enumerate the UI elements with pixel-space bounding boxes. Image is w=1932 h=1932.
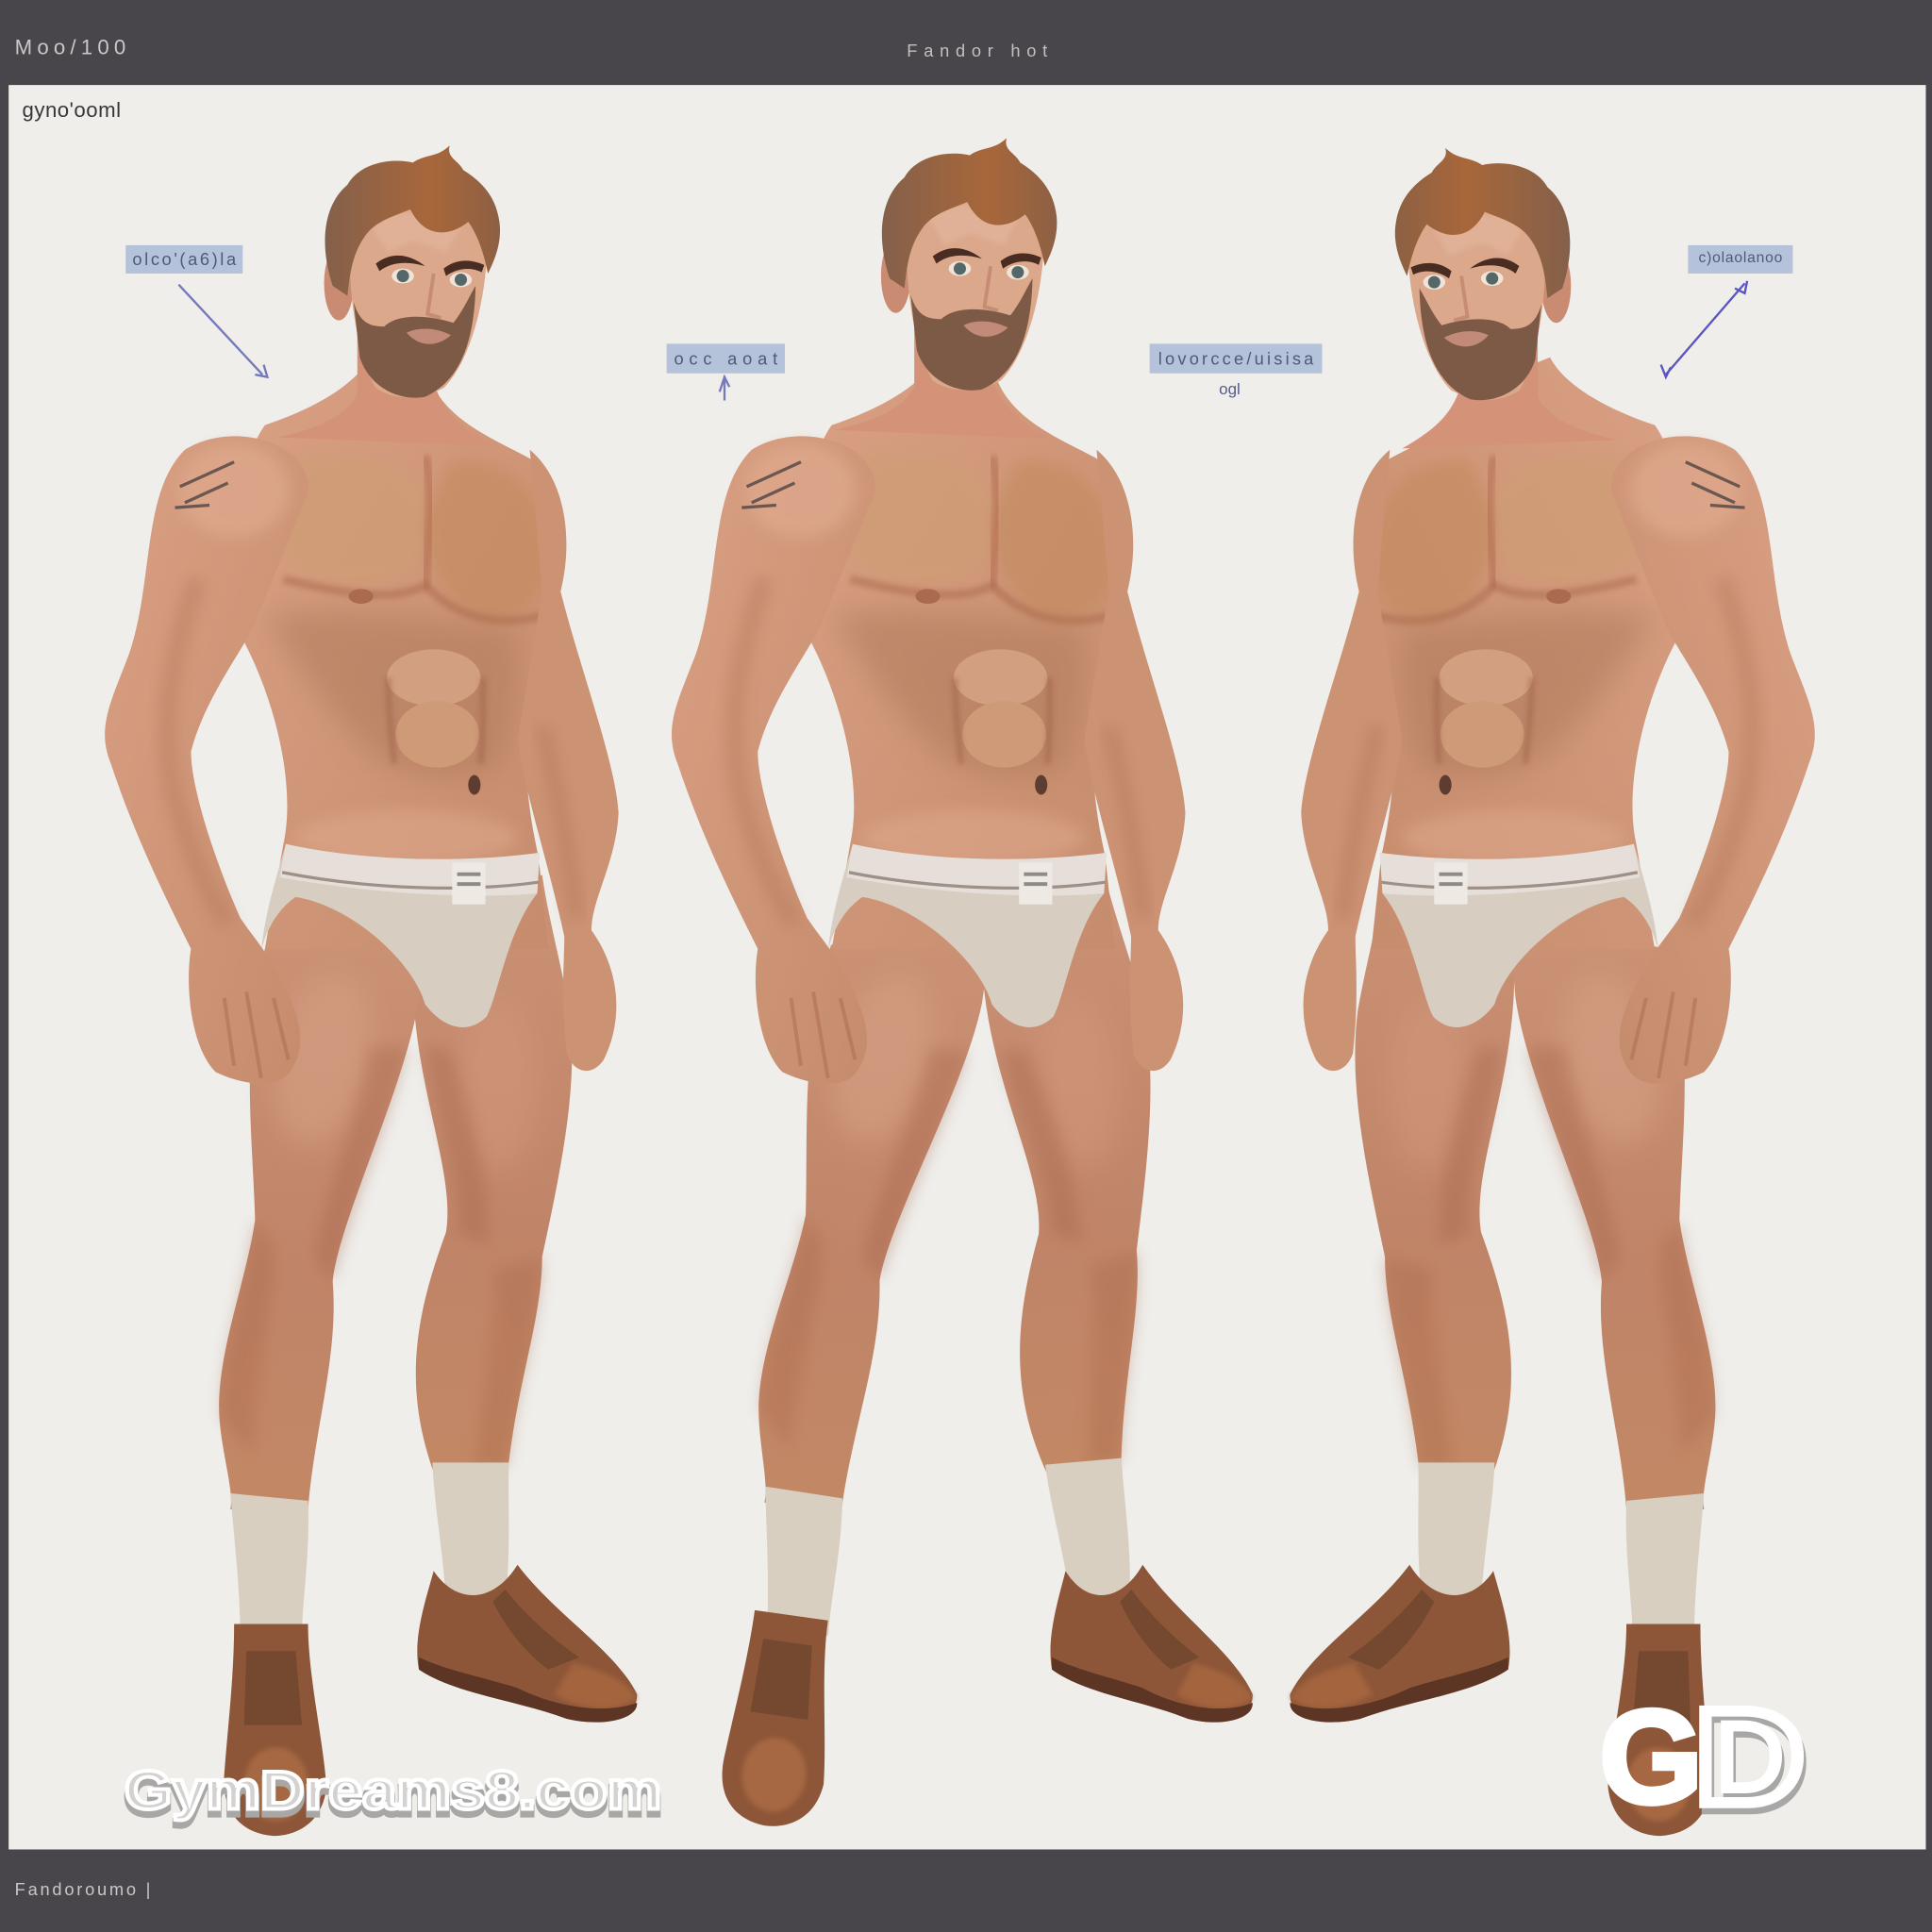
callout: label three: [1150, 343, 1322, 374]
callout: label two: [667, 343, 785, 374]
callout: label four: [1688, 245, 1792, 274]
header left label: Moo/100: [15, 35, 125, 58]
arrow: label four: [1661, 281, 1747, 377]
callout: label four: c)olaolanoo: [1698, 250, 1783, 266]
callout: label three: lovorcce/uisisa: [1158, 349, 1314, 369]
header center label: Fandor hot: [907, 41, 1047, 60]
top header bar: [0, 0, 1932, 84]
bottom footer bar: [0, 1851, 1932, 1932]
logo: GD: G: [1599, 1682, 1703, 1831]
arrow: label two: [720, 375, 729, 400]
footer label: Fandoroumo |: [15, 1879, 150, 1899]
callout: label one: olco'(a6)la: [132, 249, 237, 269]
watermark text: GymDreams8.com: [125, 1760, 661, 1821]
watermark shadow: GymDreams8.com: [125, 1767, 661, 1827]
figure: left view: [105, 145, 637, 1836]
figure: centre view: [672, 138, 1253, 1833]
logo: GD: D: [1695, 1682, 1804, 1831]
logo: GD: [1599, 1682, 1807, 1837]
callout: label one: [125, 245, 242, 274]
callout: label two: occ aoat: [674, 349, 777, 369]
small note under label three: ogl: [1219, 380, 1241, 398]
logo: GD: D: [1698, 1688, 1807, 1837]
panel corner label: gyno'ooml: [23, 98, 121, 122]
figure: right view: [1290, 148, 1815, 1836]
arrow: label one: [178, 285, 267, 377]
